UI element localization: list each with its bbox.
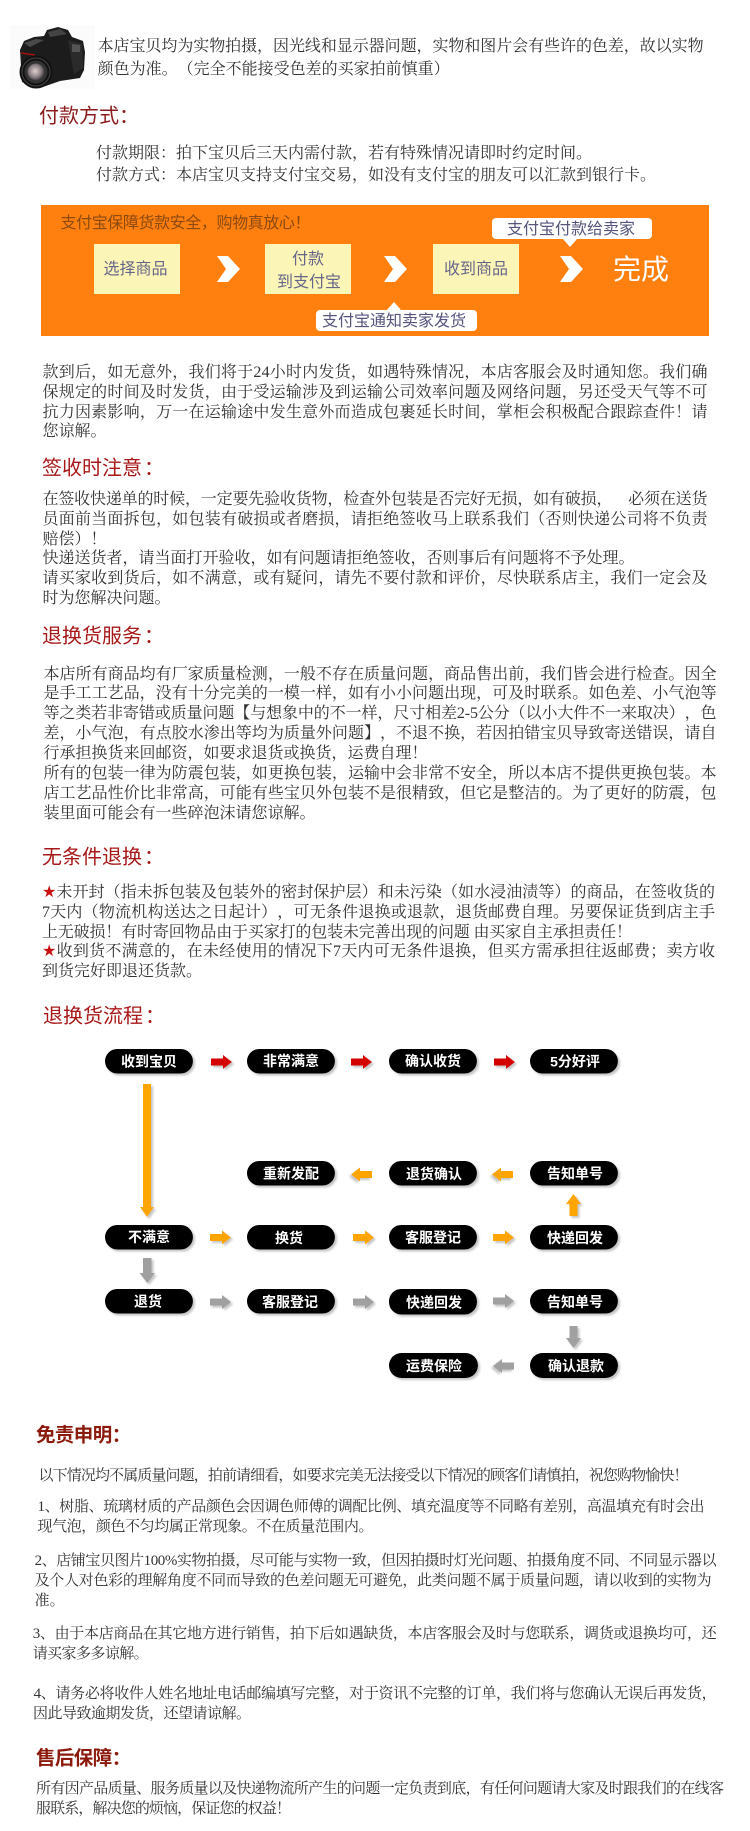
arrow: orange right 1 [210,1230,231,1244]
disclaimer text: 准。 [35,1592,65,1609]
arrow: gray right 2 [353,1295,374,1309]
pill: service log [389,1225,477,1250]
after-sales text: 服联系，解决您的烦恼，保证您的权益！ [36,1799,291,1817]
pill: not satisfied: 不满意 [128,1229,170,1245]
intro text: 本店宝贝均为实物拍摄，因光线和显示器问题，实物和图片会有些许的色差，故以实物 [98,37,704,55]
returns service text: 装里面可能会有一些碎泡沫请您谅解。 [44,804,316,822]
pill: service log 2 [247,1289,335,1314]
arrow: red 1 [211,1055,232,1069]
disclaimer text: 因此导致逾期发货，还望请谅解。 [33,1704,251,1722]
step: goods received [433,244,519,294]
signing text: 快递送货者，请当面打开验收，如有问题请拒绝签收，否则事后有问题将不予处理。 [42,549,635,567]
pill: received: 收到宝贝 [121,1054,177,1070]
unconditional returns text: ★未开封（指未拆包装及包装外的密封保护层）和未污染（如水浸油渍等）的商品，在签收货的 [42,882,715,901]
disclaimer text: 3、由于本店商品在其它地方进行销售，拍下后如遇缺货，本店客服会及时与您联系，调货或退换均可，还 [33,1624,718,1642]
pill: very satisfied [247,1049,335,1074]
panel: alipay process [41,205,709,336]
pill: confirm refund: 确认退款 [548,1358,604,1374]
heading: payment: 付款方式： [39,100,139,129]
shipping text: 您谅解。 [42,422,107,440]
callout: alipay notifies seller: 支付宝通知卖家发货 [322,312,466,330]
pill: service log 2: 客服登记 [262,1294,318,1310]
step: pay to alipay [265,244,351,294]
pill: courier return 2: 快递回发 [406,1294,462,1310]
callout: alipay notifies seller [316,302,477,331]
payment text: 付款方式：本店宝贝支持支付宝交易，如没有支付宝的朋友可以汇款到银行卡。 [96,166,656,184]
unconditional returns text: 上无破损！有时寄回物品由于买家打的包装未完善出现的问题 由买家自主承担责任！ [42,922,632,941]
pill: received [105,1049,193,1074]
pill: shipping insurance: 运费保险 [406,1358,462,1374]
signing text: 时为您解决问题。 [42,589,171,607]
signing text: 赔偿）！ [42,530,107,548]
pill: shipping insurance [389,1353,478,1378]
arrow: gray left [493,1359,514,1373]
unconditional returns text: 7天内（物流机构送达之日起计），可无条件退换或退款，退货邮费自理。另要保证货到店主手 [42,903,715,921]
arrow: orange left 1 [351,1168,372,1182]
intro text: 颜色为准。（完全不能接受色差的买家拍前慎重） [98,59,450,78]
arrow: gray down 2 [566,1326,581,1348]
pill: confirm receipt: 确认收货 [405,1053,461,1069]
signing text: 请买家收到货后，如不满意，或有疑问，请先不要付款和评价，尽快联系店主，我们一定会及 [42,568,708,587]
arrow: chevron 1 [217,256,240,282]
payment text: 付款期限：拍下宝贝后三天内需付款，若有特殊情况请即时约定时间。 [96,144,592,162]
disclaimer text: 1、树脂、琉璃材质的产品颜色会因调色师傅的调配比例、填充温度等不同略有差别，高温填充有时会出 [38,1497,704,1515]
disclaimer text: 以下情况均不属质量问题，拍前请细看，如要求完美无法接受以下情况的顾客们请慎拍，祝您购物愉快！ [38,1466,688,1484]
pill: courier return 2 [389,1289,477,1314]
signing text: 员面前当面拆包，如包装有破损或者磨损，请拒绝签收马上联系我们（否则快递公司将不负责 [42,510,708,528]
heading: disclaimer: 免责申明： [36,1418,131,1448]
returns service text: 是手工工艺品，没有十分完美的一模一样，如有小小问题出现，可及时联系。如色差、小气泡等 [44,683,716,702]
returns service text: 本店所有商品均有厂家质量检测，一般不存在质量问题，商品售出前，我们皆会进行检查。因全 [44,665,716,683]
pill: service log: 客服登记 [405,1230,461,1246]
pill: five star [530,1049,618,1074]
shipping text: 保规定的时间及时发货，由于受运输涉及到运输公司效率问题及网络问题，另还受天气等不可 [42,383,708,401]
after-sales text [36,1779,724,1817]
heading: returns service: 退换货服务： [42,620,164,649]
pill: return goods [105,1289,193,1314]
shipping text: 款到后，如无意外，我们将于24小时内发货，如遇特殊情况，本店客服会及时通知您。我们确 [42,363,708,381]
arrow: gray right 3 [493,1294,514,1308]
pill: tracking number [530,1161,618,1186]
pill: tracking number 2 [530,1289,618,1314]
pill: very satisfied: 非常满意 [263,1053,319,1069]
step: done: 完成 [613,254,669,285]
pill: tracking number 2: 告知单号 [547,1294,603,1310]
unconditional returns text: 到货完好即退还货款。 [42,962,202,980]
step: choose goods: 选择商品 [104,260,168,278]
arrow: orange up [566,1194,581,1216]
callout: alipay pays seller [492,218,652,247]
callout: alipay pays seller: 支付宝付款给卖家 [507,220,635,238]
pill: courier return [530,1225,618,1250]
returns service text: 等之类若非寄错或质量问题【与想象中的不一样，尺寸相差2-5公分（以小大件不一来取决），色 [44,703,716,722]
arrow: long orange down [140,1084,154,1217]
step: pay to alipay: 到支付宝 [277,273,341,291]
pill: return confirmed: 退货确认 [406,1166,462,1182]
shipping text [42,363,708,440]
arrow: gray right 1 [210,1295,231,1309]
signing text [42,490,708,607]
arrow: orange right 2 [353,1230,374,1244]
heading: after-sales: 售后保障： [36,1742,131,1770]
heading: unconditional returns: 无条件退换： [42,841,164,870]
disclaimer text: 及个人对色彩的理解角度不同而导致的色差问题无可避免，此类问题不属于质量问题，请以收到的实物为 [35,1571,712,1589]
pill: five star: 5分好评 [550,1054,600,1070]
pill: resend [247,1161,335,1186]
flowchart: return process [105,1049,618,1378]
arrow: chevron 2 [384,256,407,282]
disclaimer text: 4、请务必将收件人姓名地址电话邮编填写完整，对于资讯不完整的订单，我们将与您确认无误后再发货， [34,1684,717,1702]
unconditional returns text [42,882,715,980]
payment text [96,144,656,184]
pill: return goods: 退货 [134,1294,162,1310]
pill: resend: 重新发配 [263,1166,319,1182]
returns service text: 所有的包装一律为防震包装，如更换包装，运输中会非常不安全，所以本店不提供更换包装。本 [44,763,716,782]
step: goods received: 收到商品 [444,260,508,278]
panel title: 支付宝保障货款安全，购物真放心！ [60,214,310,232]
arrow: red 3 [494,1055,515,1069]
heading: signing: 签收时注意： [42,452,164,481]
unconditional returns text: ★收到货不满意的，在未经使用的情况下7天内可无条件退换，但买方需承担往返邮费；卖方收 [42,941,715,960]
arrow: gray down 1 [140,1258,155,1283]
arrow: orange right 3 [493,1230,514,1244]
returns service text: 差，小气泡，有点胶水渗出等均为质量外问题】，不退不换，若因拍错宝贝导致寄送错误，请自 [44,723,716,742]
step: pay to alipay: 付款 [292,250,324,268]
arrow: red 2 [351,1055,372,1069]
pill: confirm receipt [389,1049,477,1074]
after-sales text: 所有因产品质量、服务质量以及快递物流所产生的问题一定负责到底，有任何问题请大家及时跟我们的在线客 [36,1779,724,1797]
signing text: 在签收快递单的时候，一定要先验收货物，检查外包装是否完好无损，如有破损， 必须在送货 [42,490,708,508]
returns service text [44,665,716,822]
disclaimer text: 现气泡，颜色不匀均属正常现象。不在质量范围内。 [38,1517,374,1535]
disclaimer text [33,1466,718,1722]
pill: exchange: 换货 [275,1230,303,1246]
disclaimer text: 2、店铺宝贝图片100%实物拍摄，尽可能与实物一致，但因拍摄时灯光问题、拍摄角度不同、不同显示器以 [35,1551,718,1569]
pill: not satisfied [105,1225,193,1250]
pill: exchange [247,1225,335,1250]
returns service text: 店工艺品性价比非常高，可能有些宝贝外包装不是很精致，但它是整洁的。为了更好的防震，包 [44,783,716,802]
heading: return process: 退换货流程： [43,1000,165,1029]
intro text [98,37,704,78]
step: choose goods [94,244,180,294]
pill: courier return: 快递回发 [547,1230,603,1246]
arrow: chevron 3 [560,256,583,282]
pill: confirm refund [530,1353,618,1378]
shipping text: 抗力因素影响，万一在运输途中发生意外而造成包裹延长时间，掌柜会积极配合跟踪查件！请 [42,402,708,421]
disclaimer text: 请买家多多谅解。 [33,1644,149,1662]
pill: tracking number: 告知单号 [547,1166,603,1182]
returns service text: 行承担换货来回邮资，如要求退货或换货，运费自理！ [44,744,428,762]
icon: camera [10,25,95,89]
arrow: orange left 2 [492,1168,513,1182]
pill: return confirmed [389,1161,477,1186]
